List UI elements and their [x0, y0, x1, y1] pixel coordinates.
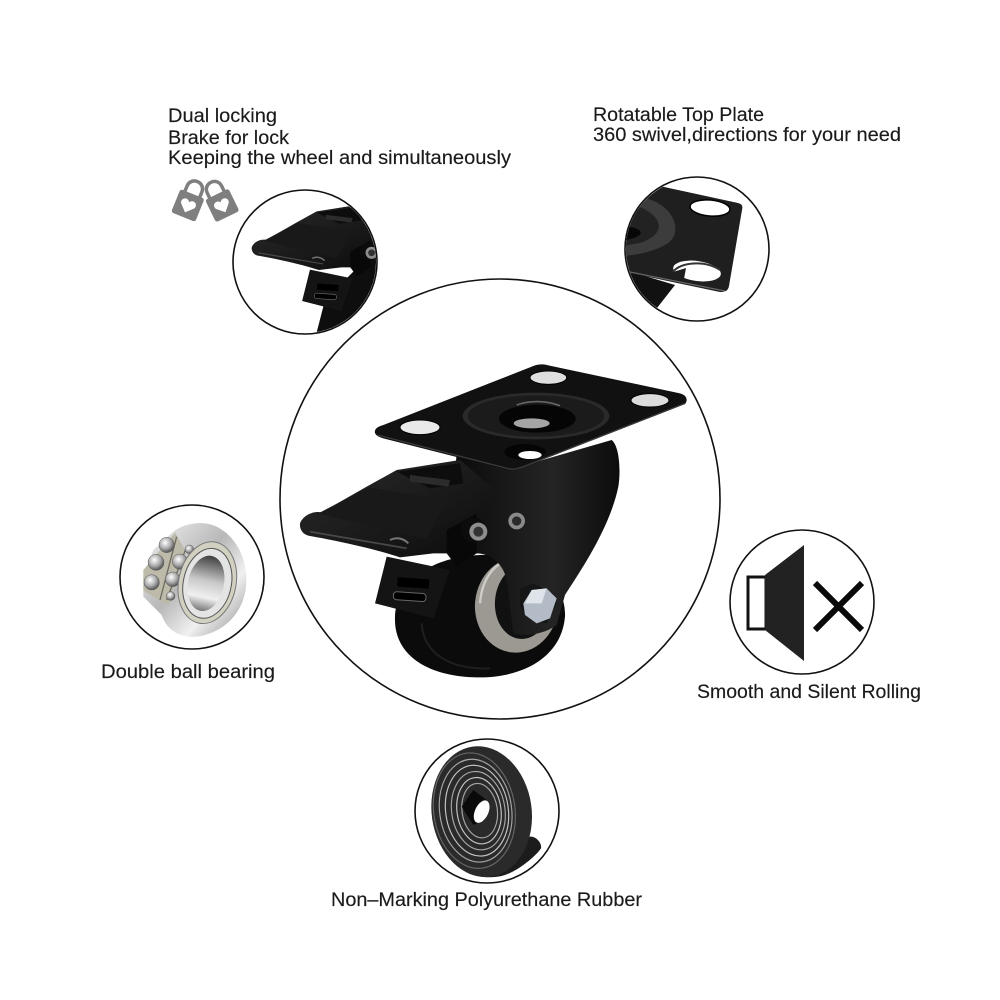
text: smooth and silent rolling: Smooth and Silent Rolling	[697, 682, 921, 703]
photo: double ball bearing	[143, 523, 246, 637]
icon: muted speaker	[748, 545, 862, 661]
rivet	[508, 513, 525, 529]
photo: swivel caster	[300, 364, 687, 677]
panel: silent rolling	[730, 530, 874, 674]
text: dual locking: Keeping the wheel and simultaneously	[168, 148, 512, 169]
top plate	[375, 364, 687, 470]
text: non-marking polyurethane rubber: Non–Marking Polyurethane Rubber	[331, 890, 643, 911]
icon: twin padlocks	[171, 177, 239, 222]
brake lever	[300, 460, 497, 618]
axle bolt	[520, 583, 557, 623]
text: dual locking: Brake for lock	[168, 128, 290, 149]
panel: main caster circle	[280, 279, 720, 719]
photo: brake lever close-up	[252, 205, 384, 335]
fork body	[450, 440, 619, 635]
panel: brake detail	[233, 190, 384, 335]
text: rotatable top plate: 360 swivel,directions for your need	[593, 125, 901, 146]
panel: ball bearing	[120, 505, 264, 649]
panel: polyurethane rubber	[415, 739, 559, 884]
text: double ball bearing: Double ball bearing	[101, 662, 275, 683]
text: dual locking: Dual locking	[168, 106, 277, 127]
text: rotatable top plate: Rotatable Top Plate	[593, 105, 764, 126]
photo: rubber coil	[423, 740, 541, 884]
text: rotatable top plate	[593, 105, 901, 146]
panel: top plate detail	[620, 177, 769, 321]
text: dual locking	[168, 106, 512, 169]
photo: plate close-up	[620, 185, 742, 308]
wheel	[395, 553, 565, 677]
